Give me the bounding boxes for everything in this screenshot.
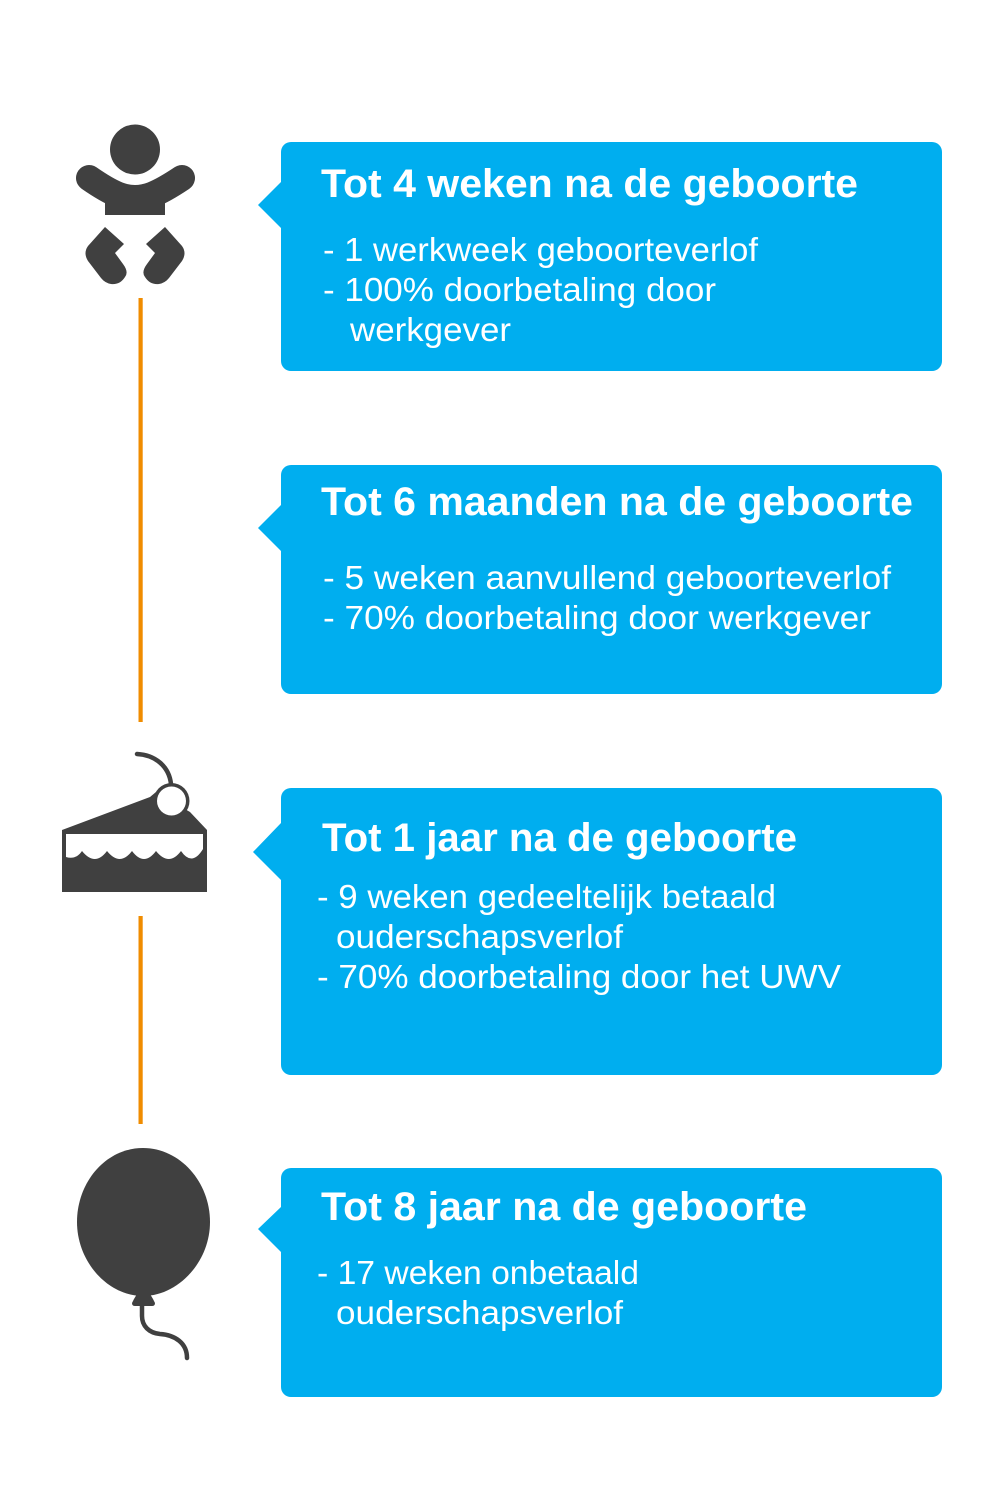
timeline line: cake to balloon: [138, 916, 143, 1124]
icon: cake slice: [62, 754, 207, 892]
heading: tot 6 maanden: Tot 6 maanden na de geboorte: [321, 480, 913, 524]
text: tot 1 jaar details: ouderschapsverlof: [336, 918, 624, 955]
text: tot 8 jaar details: - 17 weken onbetaald: [317, 1254, 639, 1291]
text: tot 6 maanden details: [323, 559, 892, 636]
panel: tot 6 maanden: [258, 465, 942, 694]
heading: tot 4 weken: Tot 4 weken na de geboorte: [321, 162, 858, 206]
panel: tot 4 weken: [258, 142, 942, 371]
text: tot 4 weken details: werkgever: [349, 311, 511, 348]
text: tot 4 weken details: [323, 231, 759, 348]
panel: tot 1 jaar: [253, 788, 942, 1075]
text: tot 6 maanden details: - 70% doorbetaling door werkgever: [323, 599, 871, 636]
text: tot 1 jaar details: [317, 878, 841, 995]
timeline line: baby to cake: [138, 298, 143, 722]
text: tot 1 jaar details: - 9 weken gedeeltelijk betaald: [317, 878, 776, 915]
panel: tot 8 jaar: [258, 1168, 942, 1397]
text: tot 1 jaar details: - 70% doorbetaling door het UWV: [317, 958, 841, 995]
text: tot 8 jaar details: [317, 1254, 639, 1331]
text: tot 4 weken details: - 1 werkweek geboorteverlof: [323, 231, 759, 268]
heading: tot 8 jaar: Tot 8 jaar na de geboorte: [321, 1185, 807, 1229]
text: tot 8 jaar details: ouderschapsverlof: [336, 1294, 624, 1331]
text: tot 6 maanden details: - 5 weken aanvullend geboorteverlof: [323, 559, 892, 596]
icon: baby: [86, 124, 184, 284]
heading: tot 1 jaar: Tot 1 jaar na de geboorte: [322, 816, 797, 860]
text: tot 4 weken details: - 100% doorbetaling door: [323, 271, 716, 308]
icon: balloon: [77, 1148, 210, 1358]
